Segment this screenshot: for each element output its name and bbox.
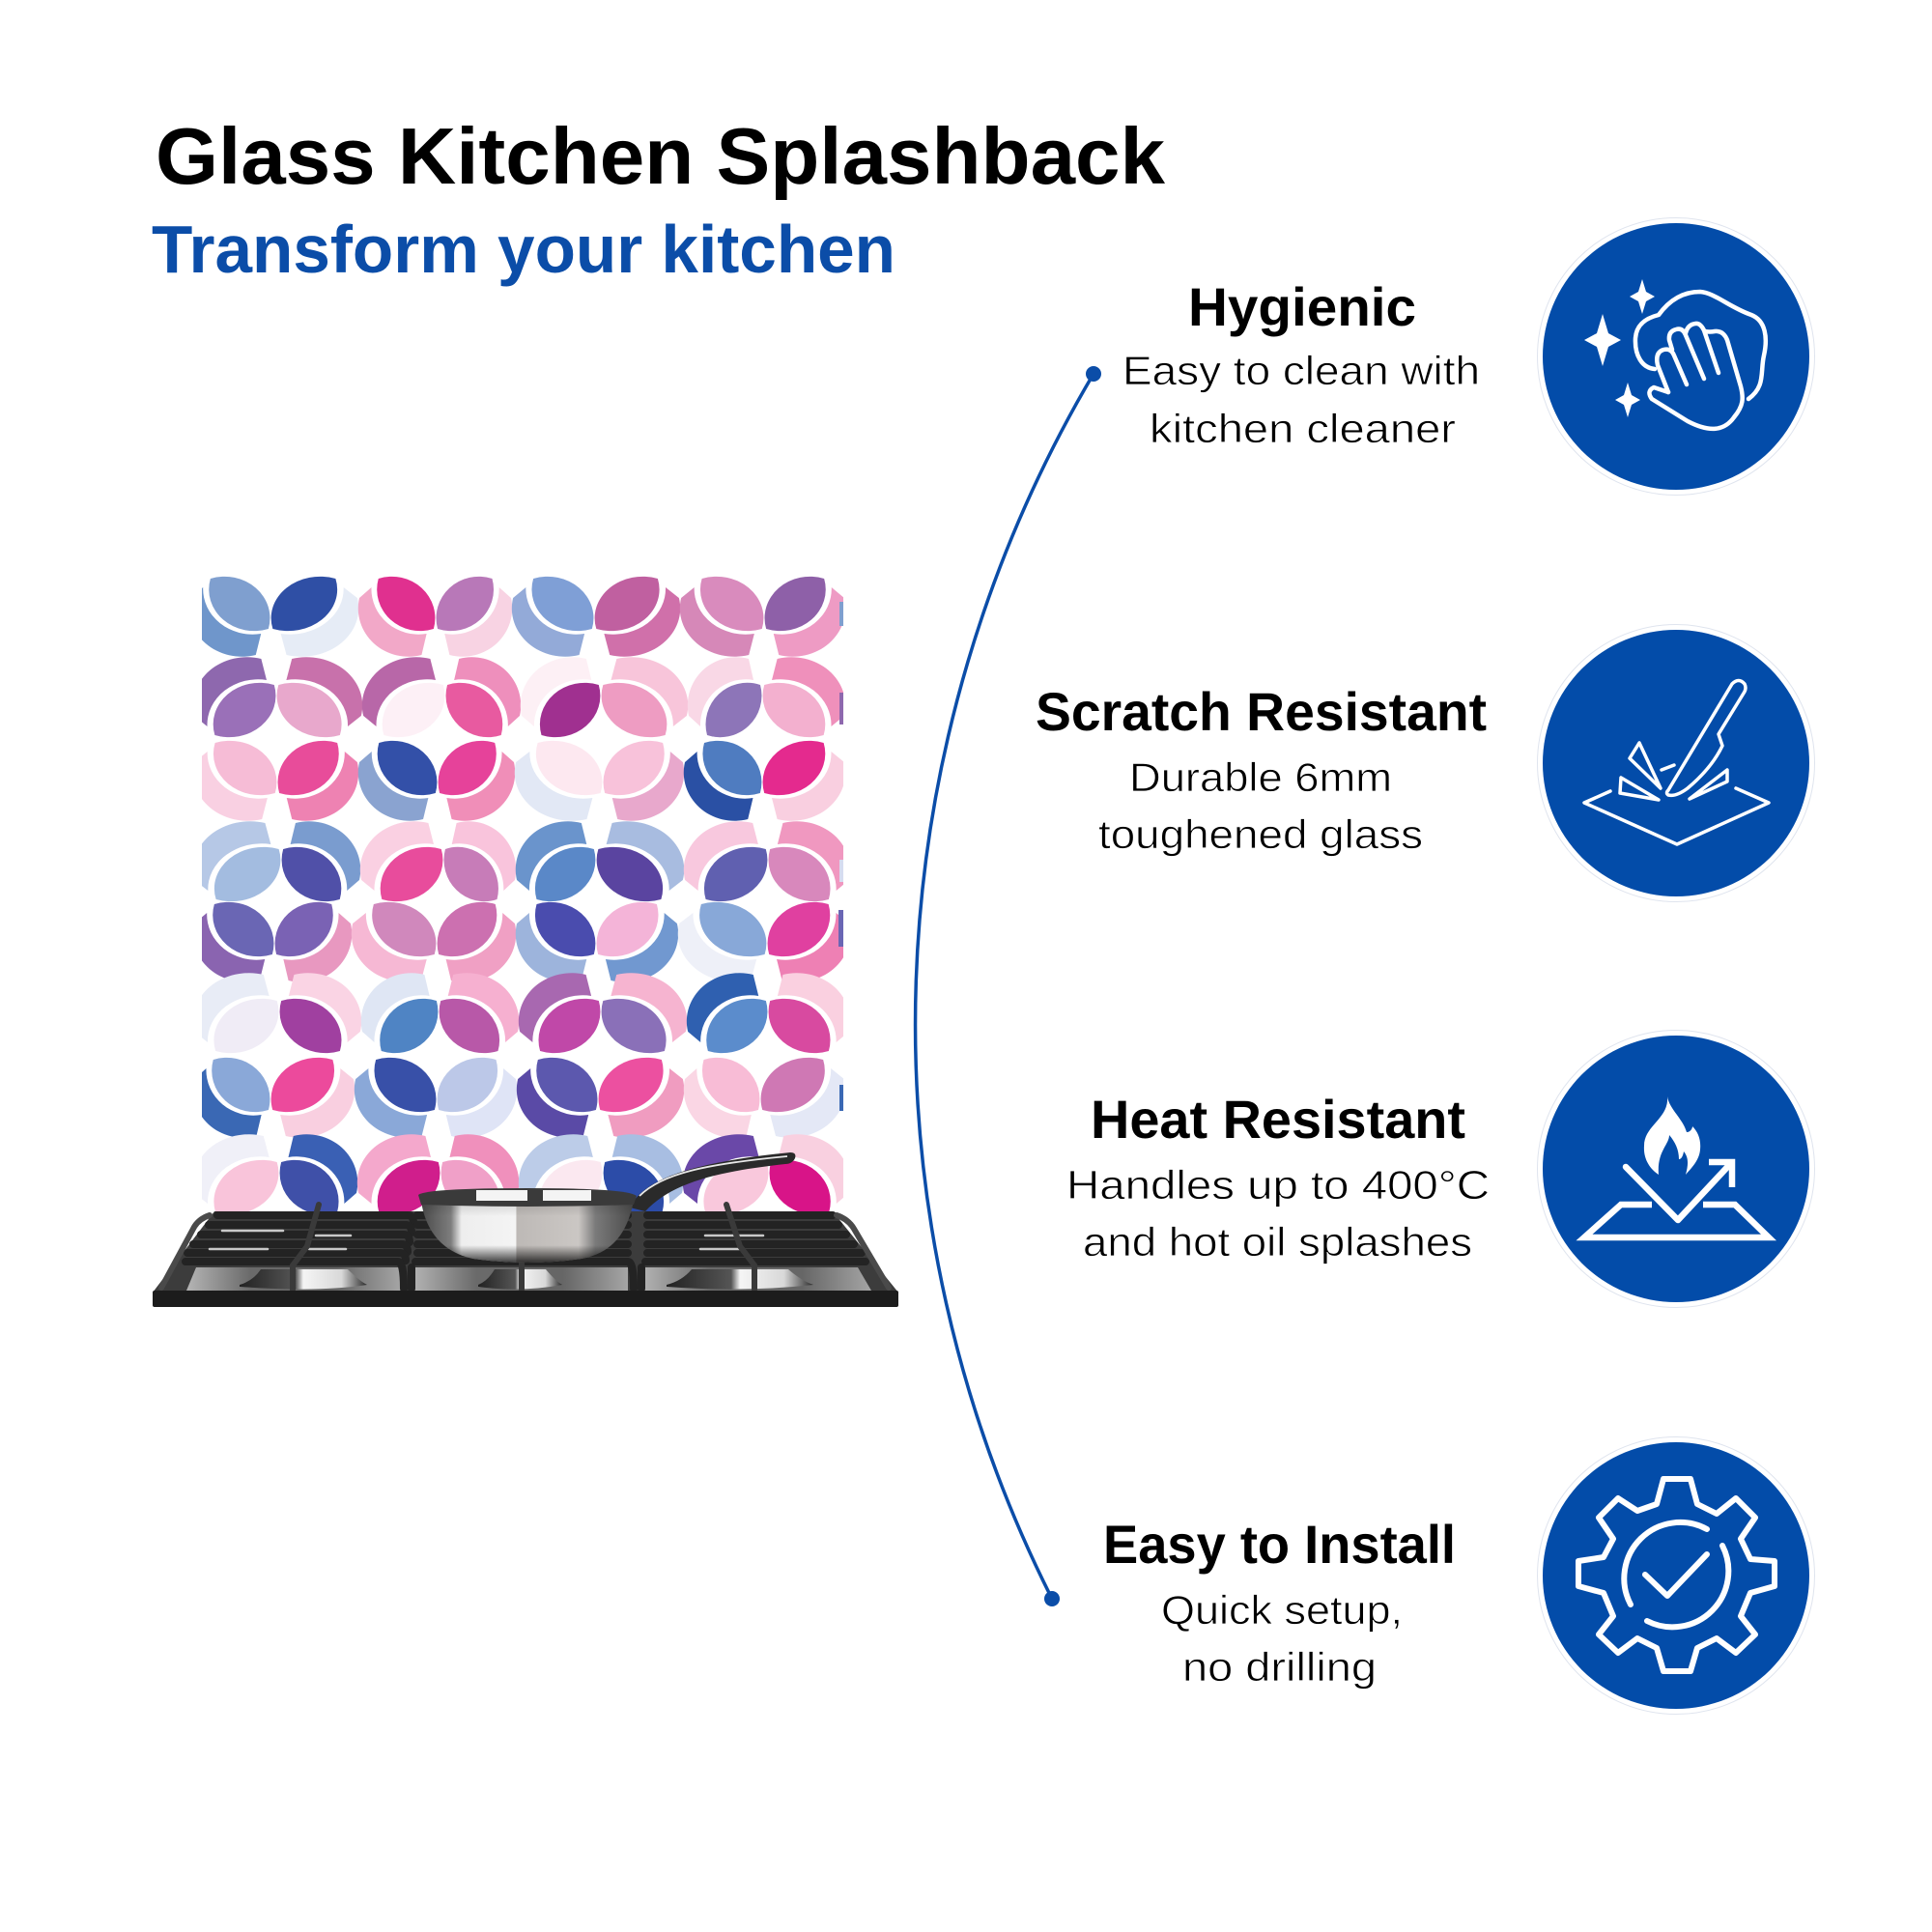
pattern row 2 <box>193 657 845 737</box>
feature: easy to install <box>1103 1514 1456 1690</box>
pattern row 4 <box>193 821 850 901</box>
right edge slivers <box>838 602 843 1111</box>
description <box>1161 1587 1403 1690</box>
check mark <box>1645 1554 1707 1596</box>
inner ring <box>1624 1522 1707 1605</box>
grate glints <box>210 1231 763 1249</box>
description: Handles up to 400°C <box>1066 1162 1490 1208</box>
feature: scratch resistant <box>1036 681 1487 857</box>
pan bowl <box>421 1201 634 1263</box>
description: toughened glass <box>1098 811 1423 857</box>
burners <box>240 1269 813 1290</box>
icon: gear with check mark <box>1538 1437 1814 1714</box>
description: Durable 6mm <box>1129 754 1392 800</box>
pattern row 3 <box>193 741 845 821</box>
description: no drilling <box>1182 1644 1377 1690</box>
frying pan <box>418 1152 795 1263</box>
pattern row 8 <box>193 1134 850 1214</box>
gas hob <box>153 1205 898 1307</box>
glass shards <box>1620 743 1727 800</box>
pattern row 1 <box>189 577 845 657</box>
heading: Heat Resistant <box>1091 1089 1465 1150</box>
icon: flame heat resistance <box>1538 1030 1814 1308</box>
grate bars <box>161 1205 889 1290</box>
description: and hot oil splashes <box>1083 1219 1472 1264</box>
side frame and vertical grates <box>161 1215 889 1288</box>
description: kitchen cleaner <box>1150 406 1456 451</box>
description: Quick setup, <box>1161 1587 1403 1633</box>
pattern row 5 <box>193 902 850 982</box>
gear outline <box>1578 1479 1775 1671</box>
description <box>1122 348 1480 451</box>
flame <box>1644 1096 1700 1175</box>
cloth and hand outline <box>1635 292 1766 429</box>
knife <box>1667 680 1746 795</box>
arrow and surface <box>1584 1162 1769 1237</box>
pattern row 7 <box>193 1058 845 1138</box>
feature: hygienic <box>1122 276 1480 451</box>
rim highlights <box>476 1190 591 1201</box>
heading: Hygienic <box>1188 276 1416 337</box>
burner panels <box>186 1267 871 1291</box>
feature: heat resistant <box>1066 1089 1490 1264</box>
hob front bar <box>153 1291 898 1307</box>
description: Easy to clean with <box>1122 348 1480 393</box>
description <box>1066 1162 1490 1264</box>
hob top surface <box>153 1211 898 1293</box>
splashback watercolor pattern <box>189 577 850 1214</box>
icon: hand wiping with sparkles <box>1538 218 1814 495</box>
pan rim <box>418 1188 637 1207</box>
glass plate <box>1584 788 1769 844</box>
heading: Scratch Resistant <box>1036 681 1487 742</box>
description <box>1098 754 1423 857</box>
connector curve with dots <box>916 366 1101 1606</box>
subtitle: Transform your kitchen <box>152 212 895 287</box>
title: Glass Kitchen Splashback <box>156 111 1166 201</box>
icon: knife scratching glass <box>1538 624 1814 902</box>
heading: Easy to Install <box>1103 1514 1456 1575</box>
sparkles <box>1584 279 1655 417</box>
pan handle <box>630 1152 795 1211</box>
pattern row 6 <box>193 973 850 1053</box>
